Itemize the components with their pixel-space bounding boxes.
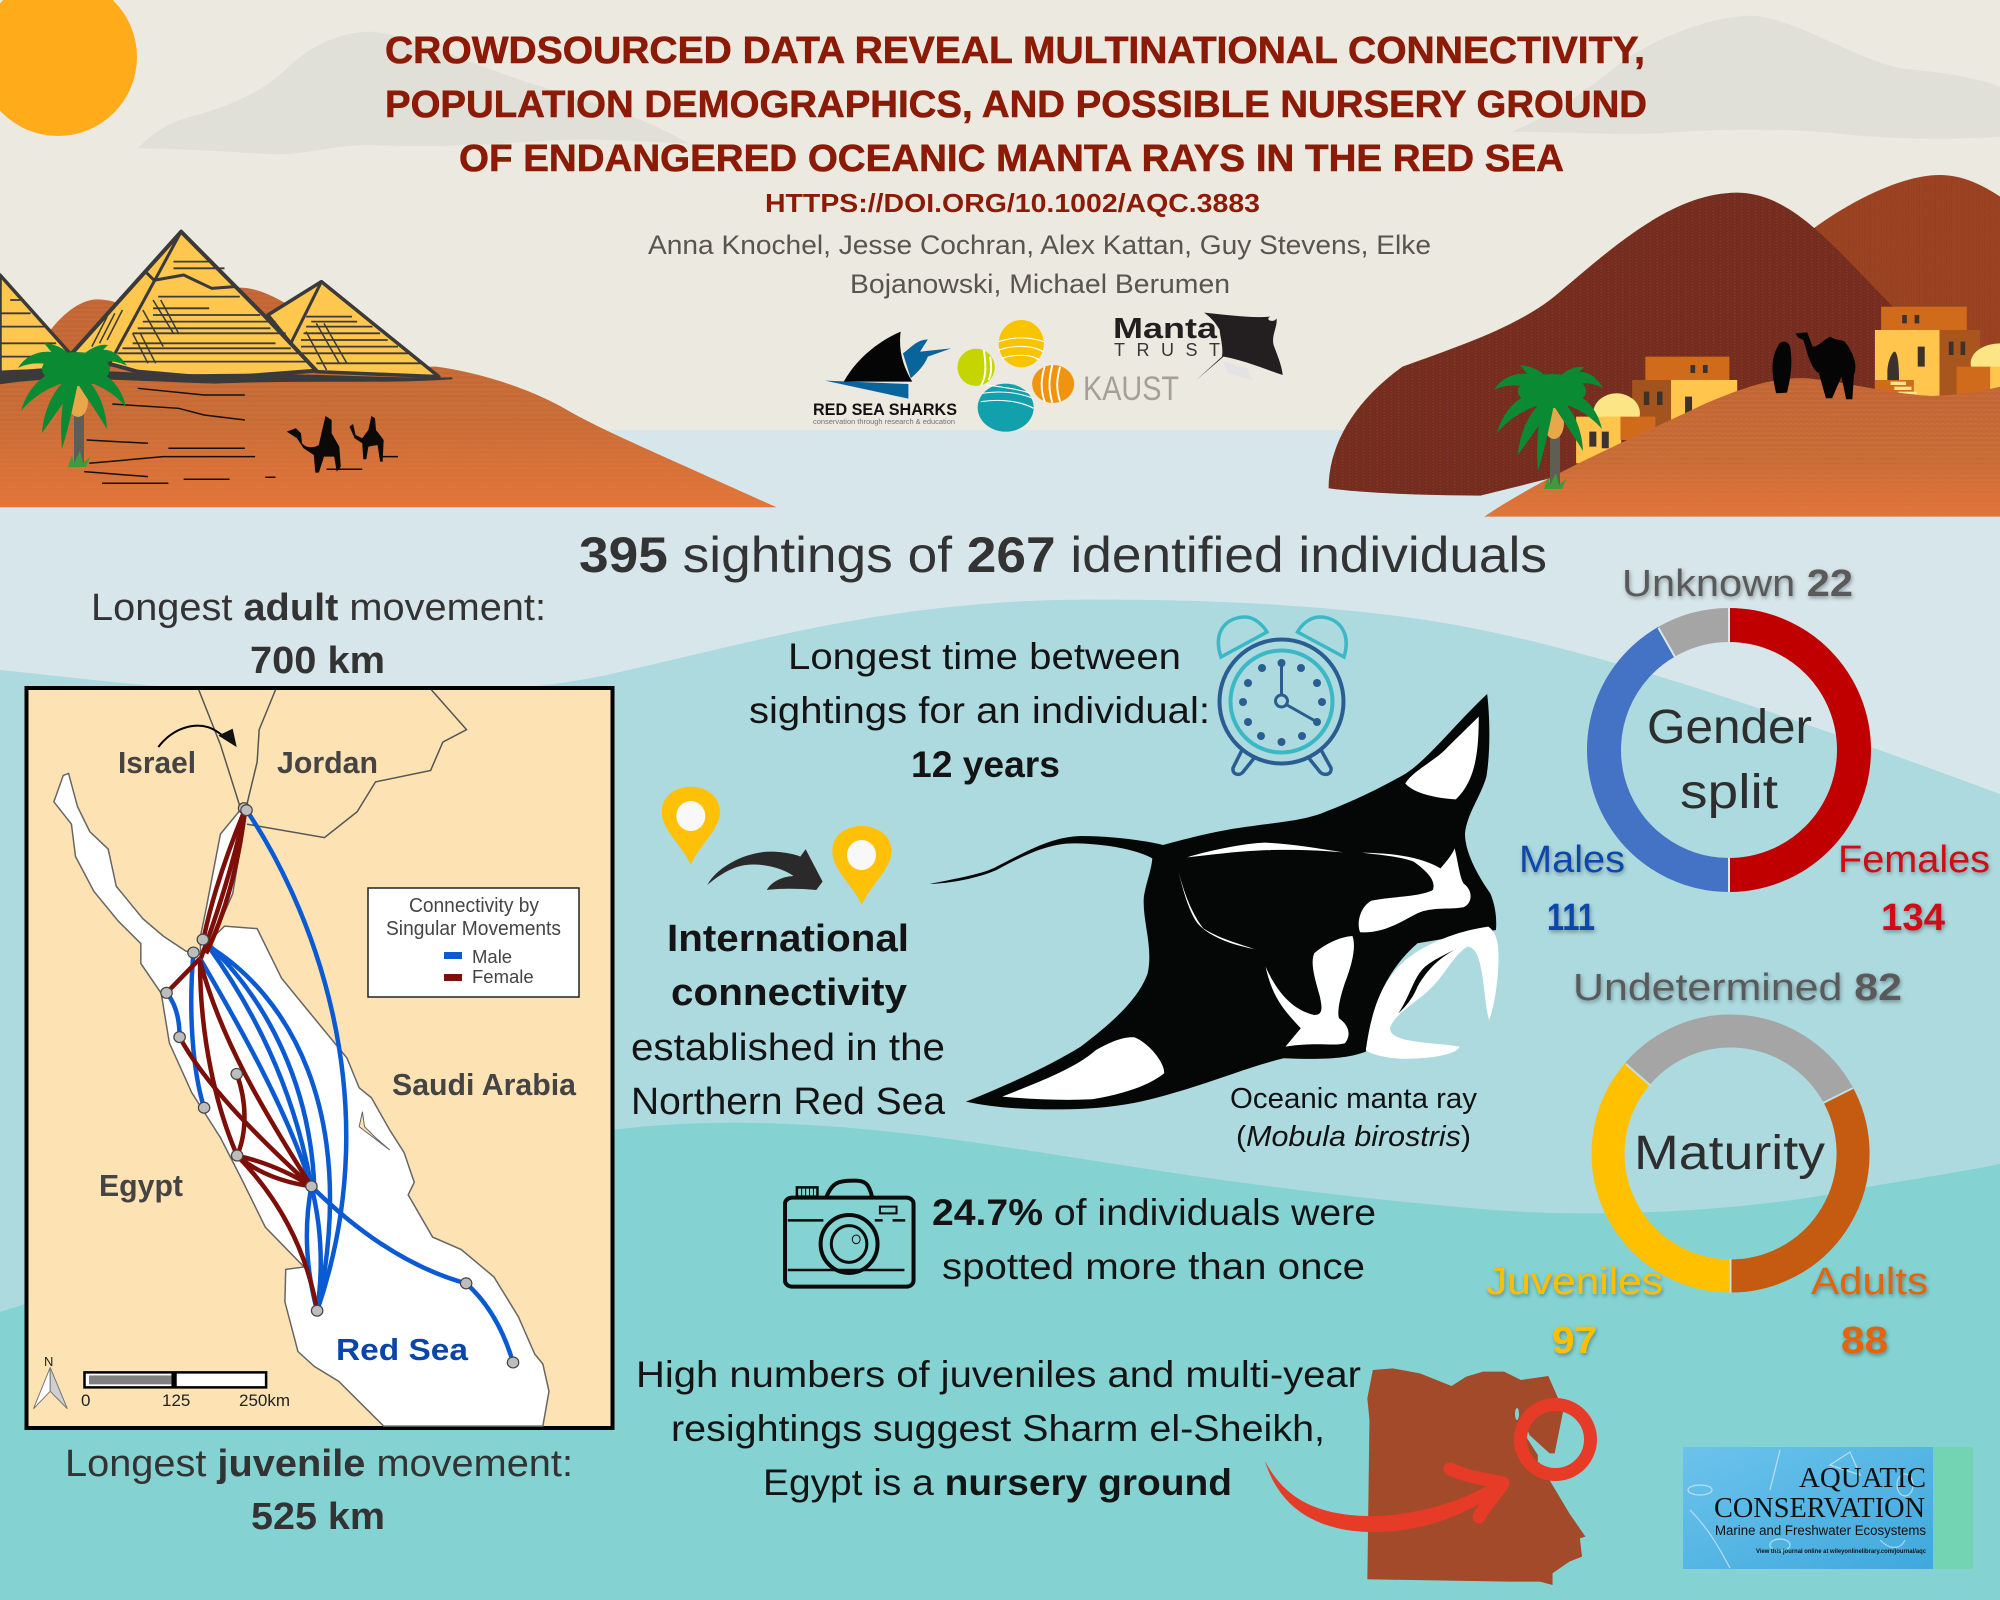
manta caption: Oceanic manta ray bbox=[1230, 1083, 1478, 1115]
background: deep sea wave bbox=[0, 1123, 2000, 1600]
label: juveniles: Juveniles bbox=[1486, 1261, 1663, 1303]
journal cover: AQUATIC bbox=[1799, 1463, 1926, 1494]
map labels: Saudi Arabia bbox=[392, 1067, 577, 1102]
sand shadow marks bbox=[84, 388, 276, 483]
arrow: to Sharm el-Sheikh bbox=[1265, 1461, 1506, 1532]
label: adults: 88 bbox=[1841, 1320, 1888, 1362]
text: international connectivity bbox=[631, 918, 946, 1123]
background: pale sea bbox=[0, 430, 2000, 1600]
palm tree: left bbox=[18, 343, 127, 467]
text: nursery ground: resightings suggest Sharm el-Sheikh, bbox=[671, 1408, 1325, 1449]
map legend: Connectivity by bbox=[409, 895, 539, 917]
manta caption bbox=[1230, 1083, 1478, 1153]
map labels: Jordan bbox=[277, 745, 378, 780]
scale labels: 250km bbox=[239, 1391, 290, 1410]
right landscape: mountains, buildings, palm and camel bbox=[1329, 175, 2000, 517]
map of Egypt bbox=[1367, 1368, 1585, 1585]
map legend bbox=[368, 888, 579, 997]
journal cover bbox=[1683, 1447, 1973, 1569]
logo: KAUST: KAUST bbox=[1083, 370, 1179, 408]
title: CROWDSOURCED DATA REVEAL MULTINATIONAL CONNECTIVITY, bbox=[385, 30, 1645, 72]
text: international connectivity: International bbox=[667, 918, 909, 960]
arrow head bbox=[218, 729, 237, 747]
camels bbox=[287, 416, 398, 473]
text: resighting percentage bbox=[932, 1192, 1376, 1287]
title bbox=[385, 30, 1647, 180]
front mountain bbox=[1329, 193, 1893, 496]
map panel bbox=[26, 688, 612, 1428]
red sea outline bbox=[54, 773, 549, 1426]
logo: Red Sea Sharks bbox=[813, 332, 957, 426]
palm tree: right bbox=[1494, 365, 1603, 489]
journal cover: View this journal online at wileyonlinelibrary.com/journal/aqc bbox=[1756, 1548, 1926, 1555]
logo: Red Sea Sharks: conservation through research & education bbox=[813, 419, 955, 426]
text: longest juvenile movement bbox=[65, 1443, 573, 1538]
buildings: right group bbox=[1875, 307, 2000, 397]
text: international connectivity: established in the bbox=[631, 1027, 945, 1069]
title: OF ENDANGERED OCEANIC MANTA RAYS IN THE RED SEA bbox=[459, 138, 1564, 180]
icon: location pin origin bbox=[662, 787, 720, 865]
background mountains bbox=[138, 16, 2000, 154]
map legend: Singular Movements bbox=[386, 918, 561, 940]
left landscape: dunes, pyramids, palm and camels bbox=[0, 232, 777, 507]
text: nursery ground: Egypt is a nursery ground bbox=[763, 1462, 1232, 1503]
north arrow bbox=[33, 1367, 67, 1409]
text: longest time between sightings: 12 years bbox=[911, 744, 1060, 785]
background: mid sea wave bbox=[0, 600, 2000, 1600]
logo: Red Sea Sharks: RED SEA SHARKS bbox=[813, 400, 957, 419]
gender split label bbox=[1647, 701, 1812, 819]
white markings bbox=[1002, 717, 1499, 1100]
text: longest adult movement bbox=[91, 587, 546, 682]
label: females: 134 bbox=[1881, 897, 1945, 939]
text: longest time between sightings: Longest time between bbox=[788, 636, 1181, 677]
text: longest juvenile movement: Longest juvenile movement: bbox=[65, 1443, 573, 1485]
scale bar bbox=[84, 1372, 266, 1387]
buildings: left group bbox=[1576, 357, 1737, 463]
logo: Manta Trust bbox=[1113, 313, 1283, 380]
text: longest time between sightings: sightings for an individual: bbox=[749, 690, 1210, 731]
map labels: Egypt bbox=[99, 1168, 183, 1203]
dunes bbox=[0, 288, 777, 507]
label: unknown: Unknown 22 bbox=[1622, 563, 1853, 605]
map legend: Female bbox=[472, 966, 534, 987]
journal cover: CONSERVATION bbox=[1714, 1493, 1925, 1524]
label: juveniles bbox=[1486, 1261, 1663, 1362]
map labels: Red Sea bbox=[336, 1332, 469, 1367]
journal cover: Marine and Freshwater Ecosystems bbox=[1715, 1523, 1926, 1538]
gender split label: Gender bbox=[1647, 701, 1812, 754]
map legend: Male bbox=[472, 946, 512, 967]
callout ring: Sharm el-Sheikh bbox=[1520, 1404, 1590, 1474]
male routes bbox=[167, 810, 513, 1362]
logo: KAUST bbox=[957, 320, 1179, 432]
text: international connectivity: Northern Red Sea bbox=[631, 1081, 946, 1123]
DOI link: HTTPS://DOI.ORG/10.1002/AQC.3883 bbox=[765, 188, 1260, 218]
map labels bbox=[99, 745, 577, 1367]
text: longest time between sightings bbox=[749, 636, 1210, 785]
label: males: Males bbox=[1519, 839, 1625, 881]
icon: camera bbox=[785, 1181, 914, 1287]
label: females bbox=[1838, 839, 1990, 939]
gender split label: split bbox=[1680, 766, 1778, 819]
arrow: Israel to Jordan bbox=[158, 726, 231, 747]
text: longest adult movement: 700 km bbox=[250, 640, 385, 682]
label: males: 111 bbox=[1547, 897, 1595, 939]
icon: sun bbox=[0, 0, 137, 136]
title: POPULATION DEMOGRAPHICS, AND POSSIBLE NURSERY GROUND bbox=[385, 84, 1647, 126]
back mountain bbox=[1807, 175, 2000, 393]
authors: Bojanowski, Michael Berumen bbox=[850, 269, 1230, 299]
text: international connectivity: connectivity bbox=[671, 972, 907, 1014]
label: adults bbox=[1811, 1261, 1928, 1362]
authors bbox=[648, 230, 1431, 299]
label: juveniles: 97 bbox=[1552, 1320, 1597, 1362]
text: nursery ground bbox=[636, 1354, 1361, 1503]
text: nursery ground: High numbers of juveniles and multi-year bbox=[636, 1354, 1361, 1395]
scale labels: 0 bbox=[81, 1391, 90, 1410]
authors: Anna Knochel, Jesse Cochran, Alex Kattan, Guy Stevens, Elke bbox=[648, 230, 1431, 260]
pyramids bbox=[0, 232, 452, 383]
text: resighting percentage: 24.7% of individuals were bbox=[932, 1192, 1376, 1233]
front hill bbox=[1484, 378, 2000, 517]
text: resighting percentage: spotted more than once bbox=[942, 1246, 1365, 1287]
text: longest juvenile movement: 525 km bbox=[251, 1496, 385, 1538]
national borders bbox=[199, 690, 467, 838]
label: adults: Adults bbox=[1811, 1261, 1928, 1303]
scale labels: N bbox=[44, 1354, 53, 1369]
scale labels bbox=[44, 1354, 290, 1410]
maturity label: Maturity bbox=[1634, 1127, 1825, 1180]
arrow: international movement bbox=[707, 849, 823, 890]
label: females: Females bbox=[1838, 839, 1990, 881]
label: males bbox=[1519, 839, 1625, 939]
scale labels: 125 bbox=[162, 1391, 190, 1410]
logo: Manta Trust: Manta bbox=[1113, 313, 1218, 345]
donut chart: gender split bbox=[1604, 608, 1854, 892]
label: undetermined: Undetermined 82 bbox=[1573, 967, 1902, 1009]
female routes bbox=[167, 812, 317, 1311]
manta caption: (Mobula birostris ) bbox=[1236, 1121, 1471, 1153]
headline stat: 395 sightings of 267 identified individuals bbox=[579, 527, 1547, 583]
sighting sites bbox=[161, 803, 519, 1368]
map labels: Israel bbox=[118, 745, 196, 780]
icon: location pin destination bbox=[832, 826, 891, 905]
mouth sliver bbox=[1398, 950, 1454, 1013]
manta ray illustration bbox=[930, 694, 1499, 1109]
icon: alarm clock bbox=[1218, 617, 1346, 774]
camel and rider silhouette bbox=[1772, 332, 1855, 399]
text: longest adult movement: Longest adult movement: bbox=[91, 587, 546, 629]
background: sky bbox=[0, 0, 2000, 431]
body bbox=[930, 694, 1496, 1109]
donut chart: maturity bbox=[1608, 1031, 1853, 1293]
logo: Manta Trust: TRUST bbox=[1114, 340, 1220, 360]
